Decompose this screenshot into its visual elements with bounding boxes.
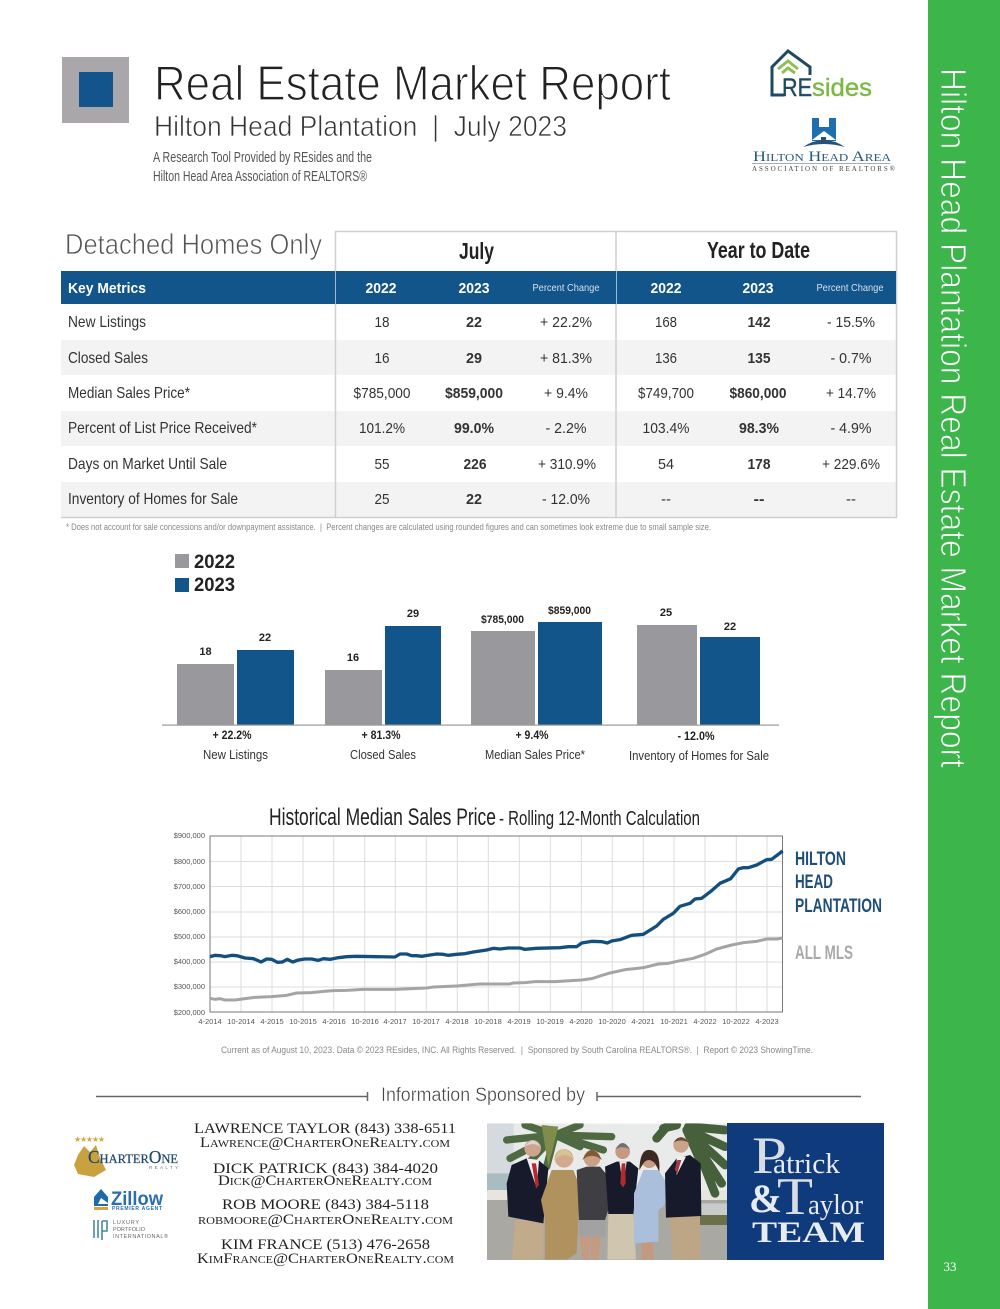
y axis labels: $300,000 — [174, 982, 205, 991]
row: Closed Sales: 136 — [655, 350, 677, 367]
row: Days on Market Until Sale: 54 — [658, 456, 674, 473]
bars: Closed Sales: + 81.3% — [362, 730, 400, 742]
logo: REsides: RE — [782, 74, 812, 102]
x axis labels: 4-2023 — [755, 1017, 779, 1026]
row: New Listings: 22 — [466, 314, 482, 331]
x axis labels: 10-2018 — [474, 1017, 502, 1026]
contact: Kim France: KimFrance@CharterOneRealty.com — [197, 1251, 454, 1267]
row: Percent of List Price Received: Percent of List Price Received* — [68, 420, 257, 437]
bars: Median Sales Price: $859,000 — [548, 605, 591, 617]
chart legend — [175, 552, 235, 596]
contact: Kim France: KIM FRANCE (513) 476-2658 — [221, 1237, 430, 1253]
x axis labels: 10-2016 — [351, 1017, 379, 1026]
chart legend: 2023 — [194, 575, 235, 596]
logo: Luxury Portfolio International: INTERNATIONAL® — [113, 1233, 168, 1240]
y axis labels: $700,000 — [174, 882, 205, 891]
bars: Median Sales Price — [471, 605, 602, 762]
y axis labels: $400,000 — [174, 957, 205, 966]
x axis labels: 10-2020 — [598, 1017, 626, 1026]
title: Real Estate Market Report — [154, 57, 671, 111]
x axis labels: 10-2021 — [660, 1017, 688, 1026]
row: Closed Sales: + 81.3% — [540, 350, 592, 367]
row: Closed Sales: 135 — [748, 350, 770, 367]
sidebar title: Hilton Head Plantation Real Estate Market Report — [933, 68, 974, 768]
contact: Rob Moore: ROB MOORE (843) 384-5118 — [222, 1197, 429, 1213]
contact: Kim France — [197, 1237, 454, 1267]
row: Inventory of Homes for Sale: -- — [661, 491, 671, 508]
row: Median Sales Price: + 14.7% — [826, 385, 876, 402]
bars: Closed Sales — [325, 608, 441, 762]
row: Days on Market Until Sale: 178 — [748, 456, 770, 473]
panel: Patrick & Taylor Team logo — [727, 1123, 884, 1260]
contact: Dick Patrick — [213, 1161, 438, 1189]
contact: Rob Moore: robmoore@CharterOneRealty.com — [198, 1212, 453, 1228]
bars: New Listings: New Listings — [203, 748, 268, 762]
table header row: Key Metrics — [68, 280, 146, 297]
logo: REsides: sides — [812, 74, 872, 102]
photo: team on the beach — [487, 1123, 727, 1260]
row: Median Sales Price: $860,000 — [730, 385, 786, 402]
line chart heading: - Rolling 12-Month Calculation — [499, 808, 700, 830]
row: Percent of List Price Received — [68, 420, 872, 437]
x axis labels: 4-2014 — [198, 1017, 222, 1026]
row: Median Sales Price: $749,700 — [638, 385, 694, 402]
row: Closed Sales — [68, 350, 872, 367]
logo: Zillow Premier Agent: Zillow — [111, 1189, 163, 1210]
page number: 33 — [944, 1259, 956, 1274]
person 3 — [577, 1150, 609, 1260]
logo: Hilton Head Area Association of Realtors: ASSOCIATION OF REALTORS® — [752, 165, 896, 173]
row: Days on Market Until Sale: 55 — [374, 456, 390, 473]
contact: Dick Patrick: DICK PATRICK (843) 384-4020 — [213, 1161, 438, 1177]
row: Days on Market Until Sale: + 310.9% — [538, 456, 596, 473]
series: Hilton Head Plantation line — [210, 851, 783, 962]
table group heading: Year to Date: Year to Date — [707, 237, 810, 263]
bars: Inventory of Homes for Sale: Inventory of Homes for Sale — [629, 749, 769, 763]
footnote: * Does not account for sale concessions and/or downpayment assistance. | Percent changes are calculated using rounded figures and can sometimes look extreme due to small sample size. — [66, 522, 711, 532]
logo: REsides — [772, 51, 872, 102]
contact: Dick Patrick: Dick@CharterOneRealty.com — [218, 1173, 432, 1189]
x axis labels: 10-2022 — [722, 1017, 750, 1026]
row: Inventory of Homes for Sale: 25 — [374, 491, 390, 508]
table header row — [61, 271, 896, 304]
bars: Closed Sales: 29 — [407, 608, 419, 620]
panel: Patrick & Taylor Team logo: atrick — [773, 1148, 841, 1180]
sponsor divider — [96, 1085, 861, 1106]
heading: Detached Homes Only: Detached Homes Only — [65, 229, 322, 261]
row: Inventory of Homes for Sale — [68, 491, 856, 508]
row: Percent of List Price Received: 101.2% — [359, 420, 405, 437]
chart series label: Hilton Head Plantation: HILTON — [795, 849, 846, 870]
row: Closed Sales: Closed Sales — [68, 350, 148, 367]
x axis labels: 4-2020 — [569, 1017, 593, 1026]
row: New Listings: 142 — [748, 314, 770, 331]
row: Percent of List Price Received: - 2.2% — [546, 420, 586, 437]
contact: Lawrence Taylor: LAWRENCE TAYLOR (843) 338-6511 — [194, 1121, 456, 1137]
logo: CharterOne Realty: ★★★★★ — [74, 1135, 105, 1144]
person 2 — [541, 1149, 580, 1260]
panel: Patrick & Taylor Team logo: T — [777, 1168, 813, 1226]
panel: Patrick & Taylor Team logo: & — [749, 1176, 782, 1221]
row: Inventory of Homes for Sale: Inventory of Homes for Sale — [68, 491, 238, 508]
row: Days on Market Until Sale: + 229.6% — [822, 456, 880, 473]
logo: Luxury Portfolio International — [94, 1220, 168, 1240]
x axis labels: 4-2015 — [260, 1017, 284, 1026]
y axis labels: $200,000 — [174, 1008, 205, 1017]
chart series label: Hilton Head Plantation: PLANTATION — [795, 896, 882, 917]
table header row: 2022 — [366, 280, 396, 297]
row: New Listings: New Listings — [68, 314, 146, 331]
row: Median Sales Price: + 9.4% — [544, 385, 588, 402]
table group heading: July: July — [459, 238, 494, 264]
bars: Inventory of Homes for Sale: 25 — [660, 607, 672, 619]
row: New Listings: 168 — [655, 314, 677, 331]
logo: CharterOne Realty: REALTY — [149, 1165, 178, 1170]
panel: green sidebar — [928, 0, 1000, 1309]
table header row: Percent Change — [532, 282, 600, 294]
y axis labels: $500,000 — [174, 932, 205, 941]
row: Days on Market Until Sale — [68, 456, 880, 473]
chart legend: 2022 — [194, 552, 235, 573]
bars: New Listings — [177, 632, 294, 762]
row: Inventory of Homes for Sale: - 12.0% — [542, 491, 590, 508]
x axis labels: 10-2015 — [289, 1017, 317, 1026]
bars: Median Sales Price: Median Sales Price* — [485, 748, 585, 762]
x axis labels: 10-2017 — [412, 1017, 440, 1026]
bars: New Listings: 18 — [199, 646, 212, 658]
bars: Median Sales Price: $785,000 — [481, 614, 524, 626]
bars: Median Sales Price: + 9.4% — [516, 730, 548, 742]
bars: Inventory of Homes for Sale: - 12.0% — [678, 731, 714, 743]
logo: CharterOne Realty: CharterOne — [88, 1147, 178, 1167]
contact: Rob Moore — [198, 1197, 453, 1228]
logo: Luxury Portfolio International: LUXURY — [113, 1220, 139, 1226]
row: Closed Sales: - 0.7% — [830, 350, 872, 367]
logo: Zillow Premier Agent: PREMIER AGENT — [112, 1206, 162, 1212]
row: Median Sales Price — [68, 385, 876, 402]
chart series label: All MLS: ALL MLS — [795, 943, 853, 964]
row: New Listings: 18 — [374, 314, 390, 331]
x axis labels: 4-2017 — [383, 1017, 407, 1026]
y axis labels: $600,000 — [174, 907, 205, 916]
subtitle: Hilton Head Plantation | July 2023 — [154, 111, 567, 143]
tagline: A Research Tool Provided by REsides and the — [153, 149, 372, 166]
table header row: 2023 — [458, 280, 490, 297]
bars: Inventory of Homes for Sale — [629, 607, 769, 763]
row: Inventory of Homes for Sale: 22 — [466, 491, 482, 508]
line chart heading: Historical Median Sales Price — [269, 804, 496, 831]
person 6 — [665, 1137, 701, 1260]
row: Closed Sales: 29 — [466, 350, 482, 367]
contact list — [194, 1121, 456, 1267]
row: Percent of List Price Received: 98.3% — [739, 420, 779, 437]
x axis labels: 4-2019 — [507, 1017, 531, 1026]
row: Median Sales Price: $859,000 — [445, 385, 503, 402]
bars: New Listings: 22 — [259, 632, 271, 644]
person 1 — [507, 1140, 548, 1260]
row: Percent of List Price Received: - 4.9% — [830, 420, 872, 437]
panel: Patrick & Taylor Team logo: TEAM — [752, 1216, 865, 1249]
panel: key metrics table — [61, 231, 897, 518]
x axis labels: 4-2022 — [693, 1017, 717, 1026]
x axis labels: 10-2014 — [227, 1017, 255, 1026]
panel: Patrick & Taylor Team logo: P — [752, 1127, 787, 1185]
person 4 — [605, 1143, 638, 1260]
x axis labels: 4-2021 — [631, 1017, 655, 1026]
line chart: historical median sales price — [174, 831, 783, 1026]
panel: Patrick & Taylor Team logo: aylor — [808, 1189, 863, 1221]
credit line: Current as of August 10, 2023. Data © 2023 REsides, INC. All Rights Reserved. | Sponsored by South Carolina REALTORS®. | Report © 2023 ShowingTime. — [221, 1045, 813, 1055]
y axis labels: $800,000 — [174, 857, 205, 866]
row: Inventory of Homes for Sale: -- — [754, 491, 764, 508]
sponsor divider: Information Sponsored by — [381, 1085, 585, 1106]
logo: Luxury Portfolio International: PORTFOLIO — [113, 1227, 146, 1233]
row: Days on Market Until Sale: 226 — [464, 456, 486, 473]
x axis labels: 10-2019 — [536, 1017, 564, 1026]
person 5 — [634, 1150, 666, 1260]
table header row: 2023 — [742, 280, 774, 297]
row: Days on Market Until Sale: Days on Market Until Sale — [68, 456, 227, 473]
contact: Lawrence Taylor: Lawrence@CharterOneRealty.com — [200, 1135, 450, 1151]
y axis labels: $900,000 — [174, 831, 205, 840]
row: Percent of List Price Received: 103.4% — [642, 420, 690, 437]
icon: grey and blue square — [62, 57, 129, 123]
row: New Listings — [68, 314, 875, 331]
tagline — [153, 149, 372, 185]
logo: Hilton Head Area Association of Realtors — [752, 118, 896, 173]
table header row: 2022 — [650, 280, 682, 297]
row: Closed Sales: 16 — [374, 350, 390, 367]
row: New Listings: - 15.5% — [827, 314, 875, 331]
logo: Zillow Premier Agent — [94, 1189, 163, 1212]
row: Percent of List Price Received: 99.0% — [454, 420, 494, 437]
x axis labels — [198, 1017, 779, 1026]
title block — [153, 57, 671, 185]
bars: New Listings: + 22.2% — [212, 730, 252, 742]
bars: Closed Sales: 16 — [347, 652, 359, 664]
series: All MLS line — [210, 938, 783, 1000]
y axis labels — [174, 831, 205, 1017]
table header row: Percent Change — [816, 282, 884, 294]
palm fronds, right — [657, 1125, 725, 1193]
x axis labels: 4-2016 — [322, 1017, 346, 1026]
row: New Listings: + 22.2% — [540, 314, 592, 331]
chart series label: Hilton Head Plantation — [795, 849, 882, 917]
x axis labels: 4-2018 — [445, 1017, 469, 1026]
row: Median Sales Price: $785,000 — [354, 385, 410, 402]
row: Inventory of Homes for Sale: -- — [846, 491, 856, 508]
bars: Inventory of Homes for Sale: 22 — [724, 621, 736, 633]
chart series label: Hilton Head Plantation: HEAD — [795, 872, 833, 893]
palm fronds, left — [507, 1125, 612, 1167]
logo: Hilton Head Area Association of Realtors: Hilton Head Area — [753, 149, 891, 165]
bars: Closed Sales: Closed Sales — [350, 748, 416, 762]
bar chart: 2022 vs 2023 — [162, 605, 779, 763]
contact: Lawrence Taylor — [194, 1121, 456, 1151]
logo: CharterOne Realty — [74, 1135, 178, 1177]
row: Median Sales Price: Median Sales Price* — [68, 385, 190, 402]
tagline: Hilton Head Area Association of REALTORS® — [153, 168, 367, 185]
